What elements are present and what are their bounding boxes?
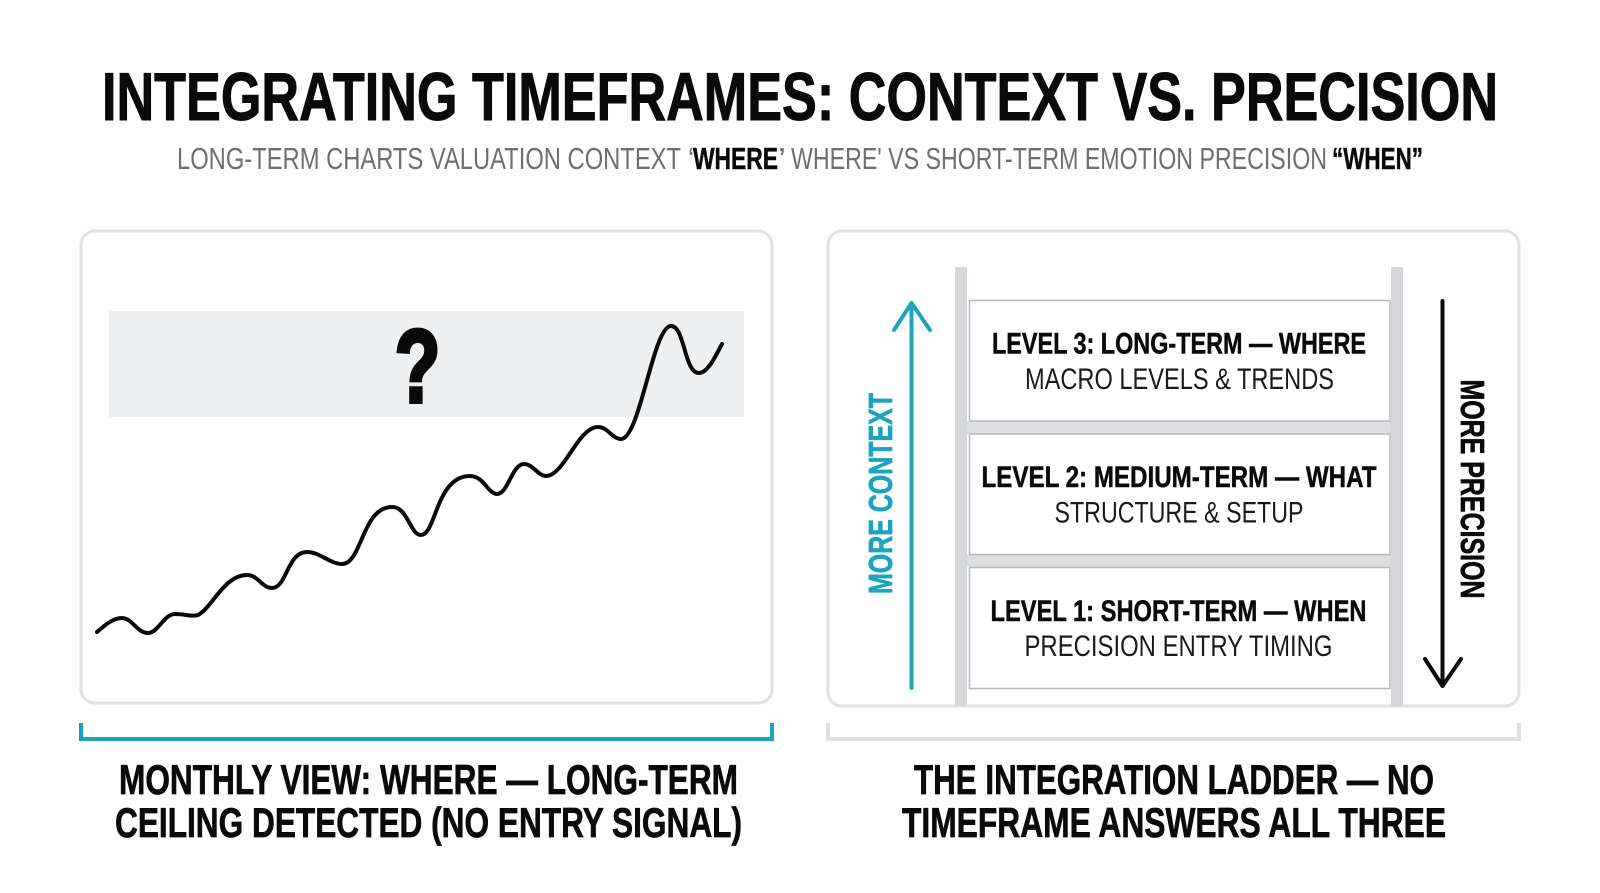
- box: level 2: [970, 434, 1390, 554]
- box: level 1: LEVEL 1: SHORT-TERM — WHEN: [990, 595, 1366, 628]
- icon: question mark: ?: [395, 309, 440, 425]
- arrow: more context: [894, 303, 930, 688]
- ladder rails: [955, 267, 1403, 706]
- box: level 3: LEVEL 3: LONG-TERM — WHERE: [992, 328, 1366, 360]
- box: level 2: LEVEL 2: MEDIUM-TERM — WHAT: [982, 461, 1376, 494]
- panel frame: [81, 231, 772, 703]
- caption: monthly view: [115, 756, 742, 846]
- ladder rungs: [967, 421, 1391, 567]
- panel: monthly chart: [81, 231, 772, 703]
- subtitle: WHERE' VS SHORT-TERM EMOTION PRECISION: [791, 141, 1327, 176]
- subtitle: ’: [778, 141, 786, 176]
- caption: integration ladder: [902, 756, 1446, 846]
- bracket: integration ladder: [828, 723, 1519, 739]
- line chart: rising price: [97, 326, 722, 633]
- subtitle: WHERE: [693, 141, 778, 176]
- ceiling zone band: [109, 311, 744, 417]
- arrow: more precision: [1425, 301, 1461, 686]
- box: level 2: STRUCTURE & SETUP: [1054, 496, 1304, 530]
- box: level 3: MACRO LEVELS & TRENDS: [1025, 363, 1334, 396]
- panel: integration ladder: [828, 231, 1519, 706]
- caption: monthly view: CEILING DETECTED (NO ENTRY SIGNAL): [115, 799, 742, 846]
- caption: monthly view: MONTHLY VIEW: WHERE — LONG-TERM: [119, 756, 738, 803]
- subtitle: [177, 141, 1423, 176]
- box: level 3: [970, 300, 1390, 421]
- panel frame: [828, 231, 1519, 706]
- bracket: monthly view: [81, 723, 772, 739]
- label: more precision: MORE PRECISION: [1454, 380, 1491, 598]
- subtitle: “WHEN”: [1332, 141, 1423, 176]
- subtitle: ‘: [688, 141, 694, 176]
- subtitle: LONG-TERM CHARTS VALUATION CONTEXT: [177, 141, 681, 176]
- box: level 1: [970, 568, 1390, 688]
- caption: integration ladder: TIMEFRAME ANSWERS ALL THREE: [902, 799, 1446, 846]
- box: level 1: PRECISION ENTRY TIMING: [1024, 630, 1332, 663]
- caption: integration ladder: THE INTEGRATION LADDER — NO: [914, 756, 1434, 803]
- label: more context: MORE CONTEXT: [862, 393, 899, 594]
